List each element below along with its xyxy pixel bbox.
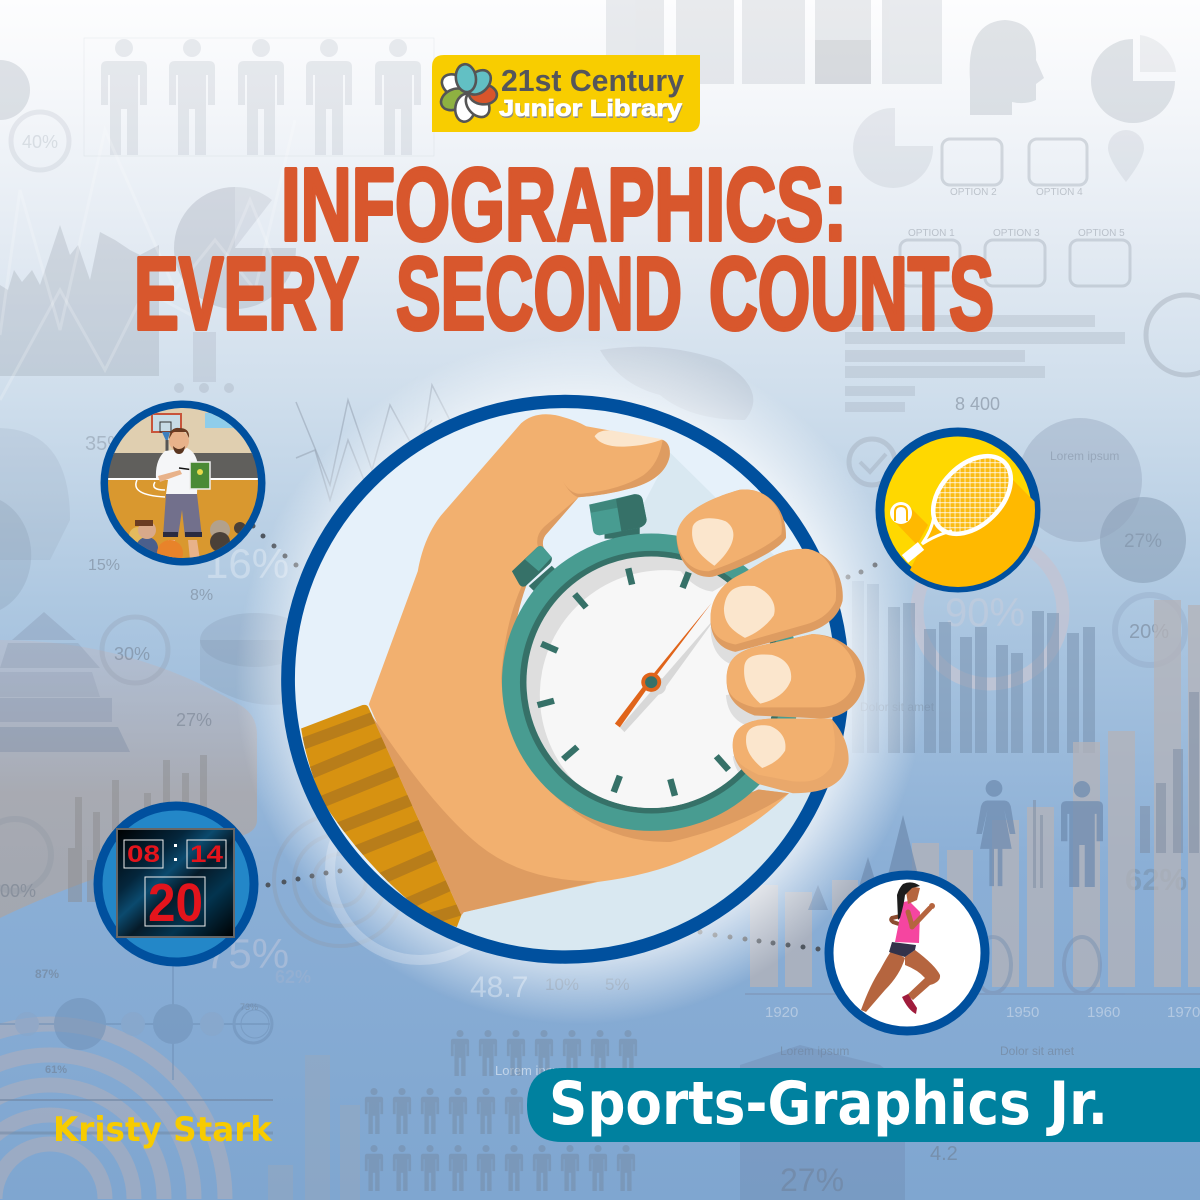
background: option boxes: OPTION 3: [993, 228, 1040, 239]
background: head and pie icons: 40%: [22, 132, 58, 152]
author name: Kristy Stark: [53, 1110, 273, 1150]
background: people chart: [84, 38, 434, 156]
background: big percentages: 4.2: [930, 1143, 958, 1165]
background: big percentages: 62%: [275, 967, 311, 987]
background: option boxes: OPTION 1: [908, 228, 955, 239]
background: right bar charts: [740, 581, 1200, 1200]
sweater cuff: [295, 701, 468, 930]
runner circle: [829, 875, 985, 1031]
background: big percentages: 35%: [85, 433, 125, 455]
title: EVERY: [134, 236, 359, 351]
tennis ball: [890, 502, 912, 524]
background: big percentages: 20%: [1129, 621, 1169, 643]
background: big percentages: 10%: [545, 975, 579, 994]
scoreboard circle: 08: [127, 841, 160, 868]
background: big percentages: 1960: [1087, 1004, 1120, 1021]
needle: [615, 603, 720, 732]
background: big percentages: 16%: [205, 540, 289, 587]
coach figure: [156, 428, 210, 560]
tennis circle: [880, 432, 1045, 600]
background: big percentages: 62%: [1125, 862, 1187, 897]
background: big percentages: 00%: [0, 881, 36, 901]
seated kids: [129, 520, 246, 558]
title: [134, 147, 994, 351]
outer ring: [288, 401, 842, 957]
racket shadow: [896, 480, 1035, 587]
tennis racket: [902, 454, 1014, 563]
background: option boxes: OPTION 2: [950, 187, 997, 198]
background: big percentages: 1950: [1006, 1004, 1039, 1021]
background: head and pie icons: [0, 20, 1176, 188]
background: big percentages: 48.7: [470, 971, 528, 1004]
background: big percentages: Lorem ipsum: [780, 1044, 849, 1058]
fingers: [676, 489, 865, 793]
scoreboard circle: 20: [148, 873, 203, 933]
background: big percentages: 27%: [780, 1162, 844, 1198]
background: big percentages: Dolor sit amet: [860, 700, 935, 714]
background: big percentages: 1970: [1167, 1004, 1200, 1021]
background: option boxes: [900, 139, 1130, 286]
runner figure: [861, 882, 940, 1014]
background: big percentages: Lorem ipsum: [1050, 449, 1119, 463]
background: big percentages: 61%: [45, 1064, 67, 1076]
background: big percentages: 87%: [35, 967, 59, 981]
hand: [369, 414, 789, 915]
background: big percentages: 75%: [205, 930, 289, 977]
title: INFOGRAPHICS:: [281, 147, 847, 262]
background: people grid: [268, 1030, 637, 1200]
background: big percentages: 1920: [765, 1004, 798, 1021]
background: big percentages: 8 400: [955, 394, 1000, 414]
background: line charts: [0, 120, 460, 500]
series banner: Sports-Graphics Jr.: [549, 1069, 1108, 1139]
background: big percentages: Dolor sit amet: [1000, 1044, 1075, 1058]
scoreboard circle: 14: [190, 841, 224, 868]
tick marks: [538, 568, 729, 796]
background: option boxes: OPTION 5: [1078, 228, 1125, 239]
background: big percentages: 90%: [945, 591, 1025, 635]
background: big percentages: 30%: [114, 644, 150, 664]
background: option boxes: OPTION 4: [1036, 187, 1083, 198]
background: big percentages: 73%: [240, 1002, 258, 1012]
background: left bar chart: [68, 755, 207, 902]
background: big percentages: 27%: [1124, 531, 1162, 552]
background: big percentages: 15%: [88, 557, 120, 574]
coach circle: [100, 405, 270, 568]
main stopwatch illustration: [282, 395, 865, 963]
title: COUNTS: [709, 236, 994, 351]
stopwatch: [502, 494, 835, 831]
crown: [589, 494, 647, 539]
background: big percentages: Lorem ipsum: [495, 1063, 570, 1078]
scoreboard circle: [98, 806, 254, 962]
background: pyramid and cylinder: [0, 428, 310, 752]
side button: [512, 546, 557, 592]
background: area chart, pie and horizontal bars: [0, 187, 1125, 420]
logo flower: [437, 63, 498, 123]
background: big percentages: 8%: [190, 587, 213, 604]
connector dots: [250, 524, 878, 952]
title: SECOND: [396, 236, 682, 351]
logo: 21st Century: [501, 63, 685, 98]
disc background: [295, 408, 832, 944]
background: big percentages: [0, 394, 1200, 1198]
background: big percentages: 27%: [176, 710, 212, 730]
logo: [432, 55, 700, 132]
background: big percentages: 5%: [605, 975, 630, 994]
logo: Junior Library: [499, 95, 682, 121]
background: rings and circles: [0, 295, 1200, 1199]
glow behind main circle: [235, 335, 925, 1025]
background: top bar chart: [606, 0, 942, 84]
logo: Junior Library: [500, 97, 683, 123]
